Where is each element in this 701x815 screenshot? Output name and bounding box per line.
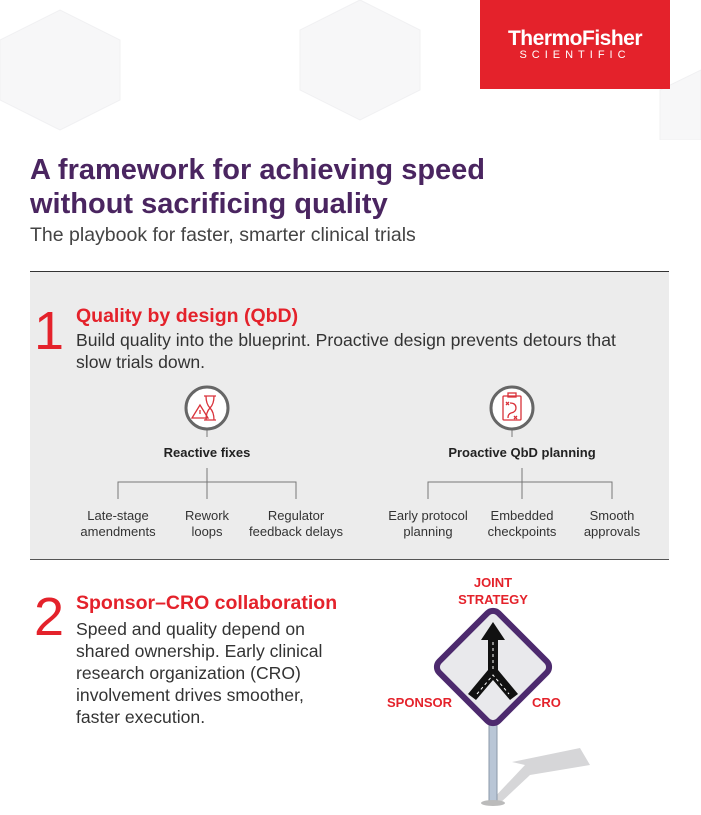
body 2: Speed and quality depend on shared ownership. Early clinical research organization (CRO) involvement drives smoother, faster execution. <box>76 619 322 727</box>
heading 2: Sponsor–CRO collaboration <box>76 592 337 614</box>
label: joint strategy: JOINT <box>474 575 512 590</box>
leaf: embedded checkpoints: checkpoints <box>488 524 556 539</box>
leaf: smooth approvals <box>584 508 640 539</box>
subtitle: The playbook for faster, smarter clinical trials <box>30 224 416 246</box>
leaf: late-stage amendments: amendments <box>80 524 156 539</box>
leaf: rework loops <box>185 508 229 539</box>
diamond sign <box>434 608 552 726</box>
label: sponsor: SPONSOR <box>387 695 453 710</box>
title <box>30 154 485 220</box>
leaf: late-stage amendments: Late-stage <box>87 508 149 523</box>
shadow <box>490 748 590 805</box>
leaf: embedded checkpoints <box>488 508 556 539</box>
leaf: rework loops: Rework <box>185 508 229 523</box>
leaf: early protocol planning <box>388 508 468 539</box>
tree diagram <box>118 386 612 499</box>
leaf: embedded checkpoints: Embedded <box>491 508 553 523</box>
leaf: early protocol planning: planning <box>403 524 453 539</box>
leaf: regulator feedback delays: Regulator <box>268 508 324 523</box>
leaf: rework loops: loops <box>191 524 223 539</box>
section 2 text <box>34 587 337 727</box>
road sign illustration <box>387 575 590 806</box>
leaf: smooth approvals: approvals <box>584 524 640 539</box>
leaf: early protocol planning: Early protocol <box>388 508 468 523</box>
pole <box>489 715 497 803</box>
background hexagon pattern <box>0 0 701 140</box>
title: A framework for achieving speed <box>30 154 485 186</box>
panel: quality by design <box>30 271 669 560</box>
body 1: Build quality into the blueprint. Proactive design prevents detours that slow trials down. <box>76 330 616 372</box>
label: proactive QbD planning: Proactive QbD planning <box>448 445 596 460</box>
title: without sacrificing quality <box>30 188 388 220</box>
number 2: 2 <box>34 587 64 647</box>
leaf: regulator feedback delays: feedback delays <box>249 524 343 539</box>
logo: SCIENTIFIC <box>519 49 631 61</box>
logo: ThermoFisher <box>508 27 642 50</box>
icon: hourglass warning <box>186 387 228 429</box>
heading 1: Quality by design (QbD) <box>76 305 298 327</box>
number 1: 1 <box>34 301 64 361</box>
leaf: smooth approvals: Smooth <box>590 508 634 523</box>
leaf: regulator feedback delays <box>249 508 343 539</box>
leaf: late-stage amendments <box>80 508 156 539</box>
logo <box>480 0 670 89</box>
label: reactive fixes: Reactive fixes <box>164 445 250 460</box>
road sign illustration: STRATEGY <box>458 592 528 607</box>
icon: clipboard plan <box>491 387 533 429</box>
label: CRO: CRO <box>532 695 561 710</box>
